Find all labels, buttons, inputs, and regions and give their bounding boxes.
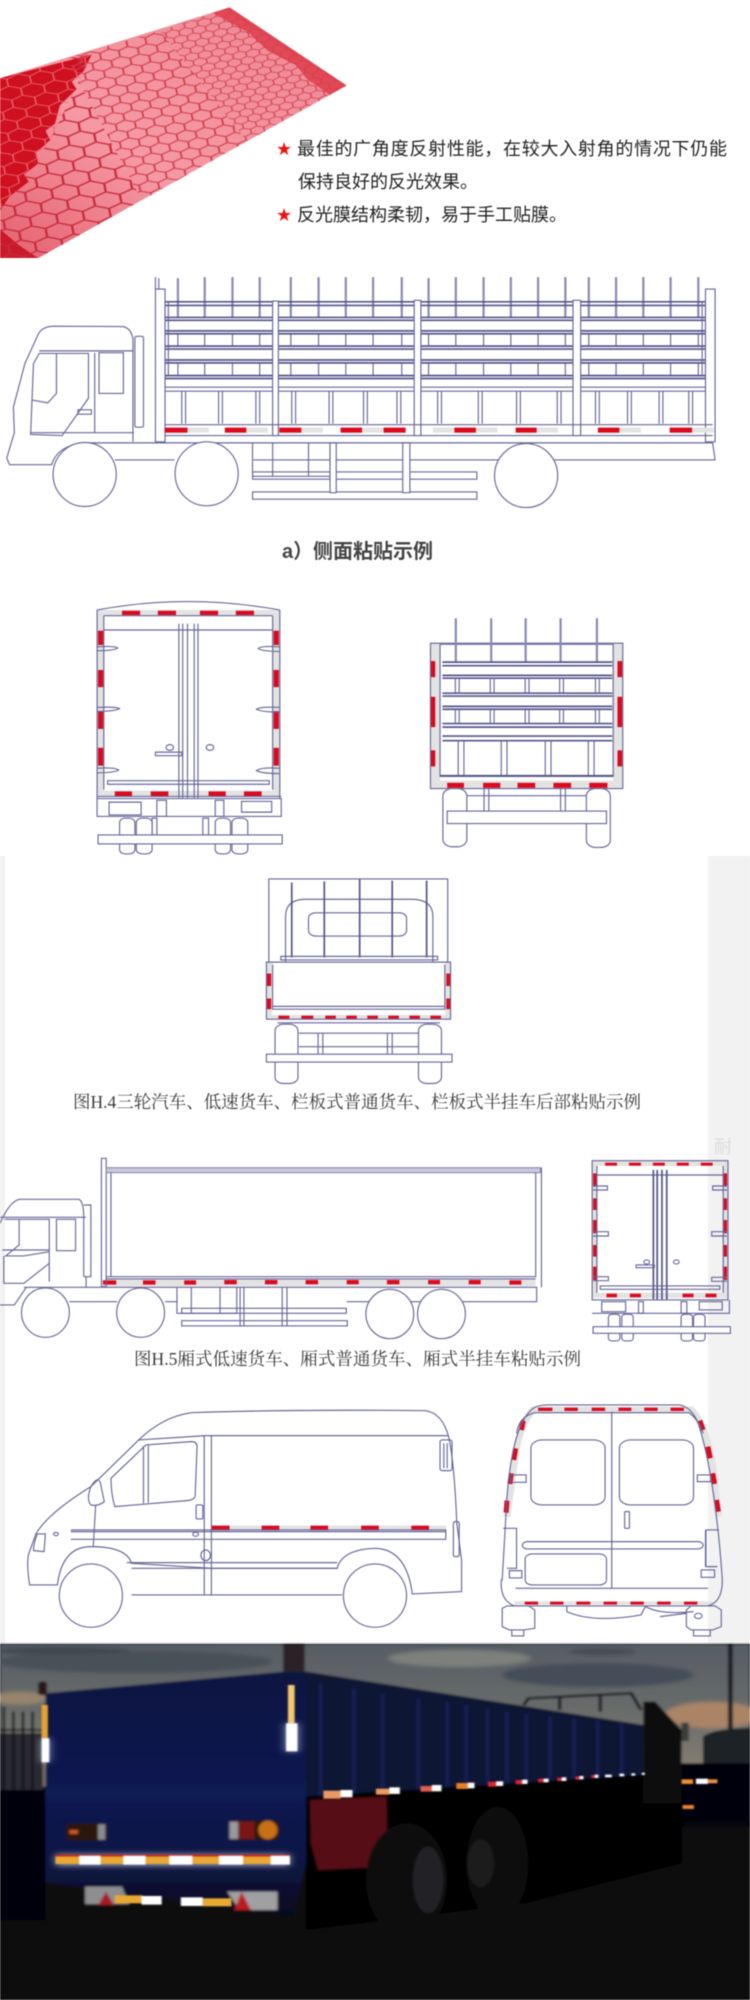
photo scene softly blurred [0, 1644, 750, 2000]
underrun plates [85, 1887, 277, 1910]
box truck and van section [0, 1158, 730, 1636]
rear view: stake truck [430, 618, 623, 847]
rear view: low-speed truck [266, 879, 452, 1084]
star bullet 2: ★ [276, 205, 292, 226]
side view box truck [0, 1158, 541, 1339]
rear post [283, 1644, 305, 1672]
tyres [366, 1807, 529, 1937]
clouds [0, 1647, 750, 1728]
side reflective strips [323, 1773, 717, 1809]
lower reflective strips [115, 1895, 231, 1906]
reflective strip [165, 428, 714, 433]
H.4 caption: 图H.4三轮汽车、低速货车、栏板式普通货车、栏板式半挂车后部粘贴示例 [73, 1092, 641, 1112]
rear views section [97, 602, 623, 1084]
truck side panel [306, 1672, 682, 1930]
night photo of truck with glowing reflective strips [0, 1644, 750, 2000]
side view van [28, 1410, 462, 1627]
fence [0, 1707, 43, 1790]
red reflective film sample [0, 7, 347, 258]
cab chassis and wheels [7, 326, 715, 508]
page background strips [0, 856, 750, 1644]
rear panel [45, 1672, 306, 1917]
sky [0, 1644, 750, 1811]
rear view: box truck [97, 602, 282, 854]
star bullet 1: ★ [276, 139, 292, 160]
rear view box truck [592, 1161, 730, 1341]
vertical reflective strips [42, 1685, 298, 1762]
side caption: a） [282, 541, 313, 563]
feature text line 3: 反光膜结构柔韧，易于手工贴膜。 [297, 205, 567, 225]
side view stake truck [7, 277, 715, 508]
lights [66, 1821, 279, 1841]
stake posts and rails [155, 277, 715, 442]
feature text line 1: 最佳的广角度反射性能，在较大入射角的情况下仍能 [297, 139, 727, 159]
feature list [276, 139, 727, 226]
strip glow [41, 1723, 299, 1866]
rear view van [501, 1405, 722, 1636]
side caption: 侧面粘贴示例 [313, 540, 433, 563]
feature text line 2: 保持良好的反光效果。 [298, 172, 478, 192]
red mudguard [310, 1797, 387, 1870]
truck cab [524, 1693, 689, 1803]
rear bumper reflective strip [55, 1855, 290, 1865]
faint watermark: 耐 [714, 1137, 732, 1157]
photo backdrop [0, 1644, 750, 2000]
distant pole and vehicle [679, 1644, 750, 1817]
H.5 caption: 图H.5厢式低速货车、厢式普通货车、厢式半挂车粘贴示例 [134, 1349, 581, 1369]
ground [0, 1797, 750, 2000]
